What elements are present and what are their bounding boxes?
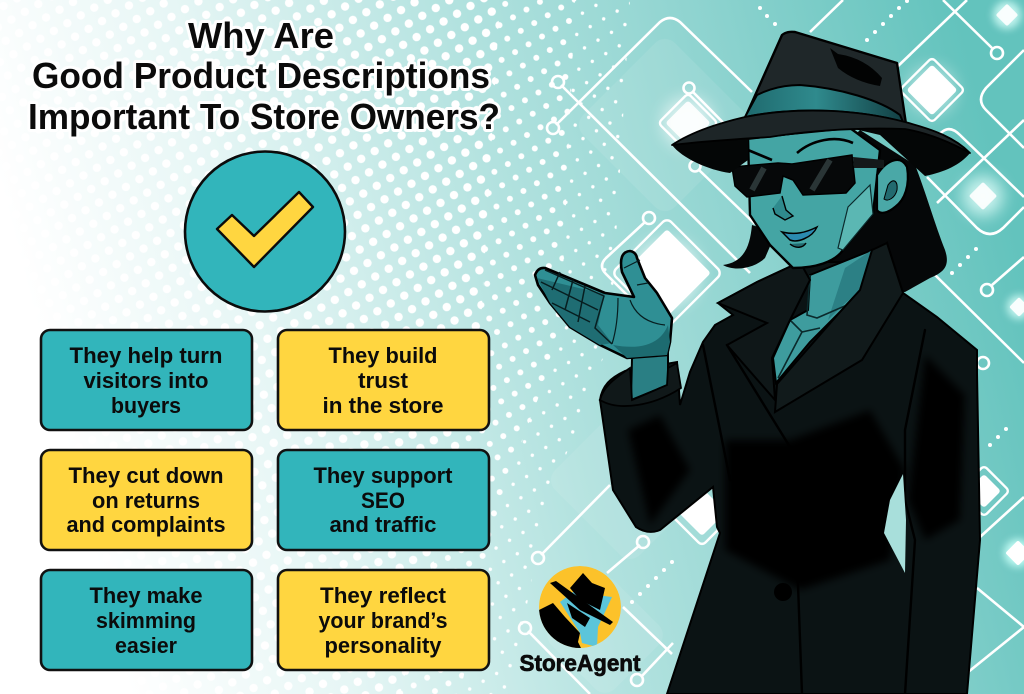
circuit nodes bbox=[519, 47, 1003, 686]
card: SEO and traffic: SEO bbox=[361, 488, 405, 513]
icon: check mark badge bbox=[185, 152, 345, 312]
cuff bbox=[600, 363, 681, 406]
neck and chest bbox=[773, 250, 872, 383]
card: SEO and traffic bbox=[278, 450, 489, 550]
glowing diamonds bbox=[612, 1, 1024, 567]
title: Good Product Descriptions bbox=[32, 55, 490, 96]
card: brand personality: They reflect bbox=[320, 583, 447, 608]
card: visitors into buyers: buyers bbox=[111, 393, 181, 418]
card: returns and complaints: and complaints bbox=[66, 512, 226, 537]
card: returns and complaints: on returns bbox=[92, 488, 200, 513]
card: build trust: They build bbox=[328, 343, 438, 368]
circuit lines bbox=[528, 0, 1024, 694]
logo: StoreAgent bbox=[520, 566, 641, 676]
card: visitors into buyers: visitors into bbox=[84, 368, 208, 393]
card: brand personality: your brand’s bbox=[318, 608, 448, 633]
gap between arm and coat bbox=[884, 474, 906, 573]
card: brand personality bbox=[278, 570, 489, 670]
card: SEO and traffic: They support bbox=[314, 463, 453, 488]
wrist bbox=[631, 352, 668, 400]
hand bbox=[535, 251, 672, 358]
character: agent in black coat and hat bbox=[535, 32, 980, 694]
card: skimming easier: They make bbox=[90, 583, 202, 608]
card: returns and complaints bbox=[41, 450, 252, 550]
card: build trust: in the store bbox=[322, 393, 444, 418]
card: returns and complaints: They cut down bbox=[68, 463, 223, 488]
coat bbox=[600, 243, 980, 694]
dotted circuit traces bbox=[630, 0, 1008, 604]
hair bbox=[723, 130, 947, 292]
face bbox=[748, 128, 908, 268]
logo badge bbox=[539, 566, 621, 650]
card: visitors into buyers: They help turn bbox=[70, 343, 222, 368]
title bbox=[28, 15, 500, 137]
sunglasses bbox=[732, 155, 884, 197]
logo wordmark: StoreAgent bbox=[520, 650, 641, 676]
card: build trust: trust bbox=[358, 368, 409, 393]
circuit lines and glowing diamonds bbox=[519, 0, 1024, 694]
card: build trust bbox=[278, 330, 489, 430]
title: Why Are bbox=[188, 15, 334, 56]
card: skimming easier: skimming bbox=[96, 608, 196, 633]
card: skimming easier bbox=[41, 570, 252, 670]
card: visitors into buyers bbox=[41, 330, 252, 430]
card: SEO and traffic: and traffic bbox=[330, 512, 436, 537]
title: Important To Store Owners? bbox=[28, 96, 500, 137]
coat lapels and collar bbox=[718, 243, 903, 412]
fedora hat bbox=[672, 32, 970, 176]
card: skimming easier: easier bbox=[115, 633, 177, 658]
card: brand personality: personality bbox=[324, 633, 442, 658]
